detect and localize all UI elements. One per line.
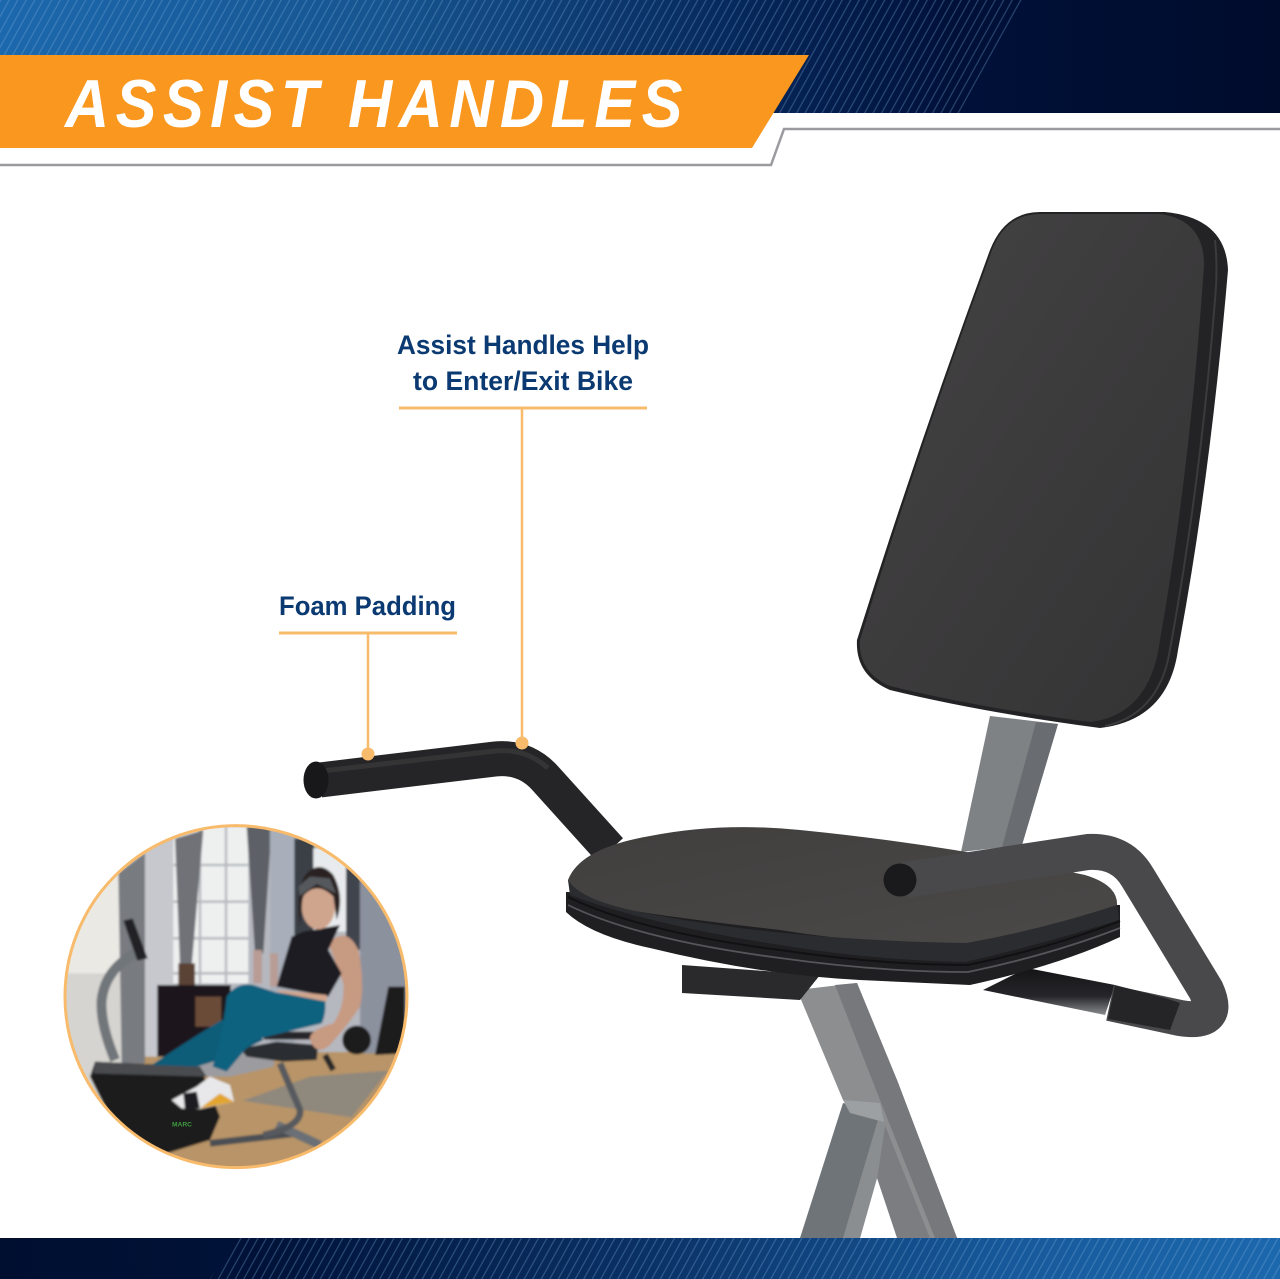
callout text: Assist Handles Help <box>397 330 649 360</box>
seat back cushion <box>857 212 1228 728</box>
seat bracket <box>682 965 820 1000</box>
callout label: Foam Padding <box>279 591 456 621</box>
right assist handle <box>884 852 1210 1030</box>
circular lifestyle photo <box>64 824 408 1170</box>
seat cushion <box>566 827 1120 985</box>
header outline <box>0 129 1280 165</box>
header band <box>0 0 1280 113</box>
bike seat product <box>304 212 1228 1238</box>
circular lifestyle photo: MARC <box>172 1122 192 1129</box>
bottom band <box>0 1238 1280 1279</box>
seat post <box>961 716 1058 852</box>
frame lower legs <box>797 983 957 1238</box>
lower handle rod <box>983 968 1115 1015</box>
callout: foam padding <box>279 591 457 760</box>
title: ASSIST HANDLES <box>63 65 682 142</box>
left assist handle <box>304 751 610 850</box>
title banner <box>0 55 809 148</box>
callout: assist handles <box>397 330 649 750</box>
callout: assist handles: to Enter/Exit Bike <box>413 366 633 396</box>
